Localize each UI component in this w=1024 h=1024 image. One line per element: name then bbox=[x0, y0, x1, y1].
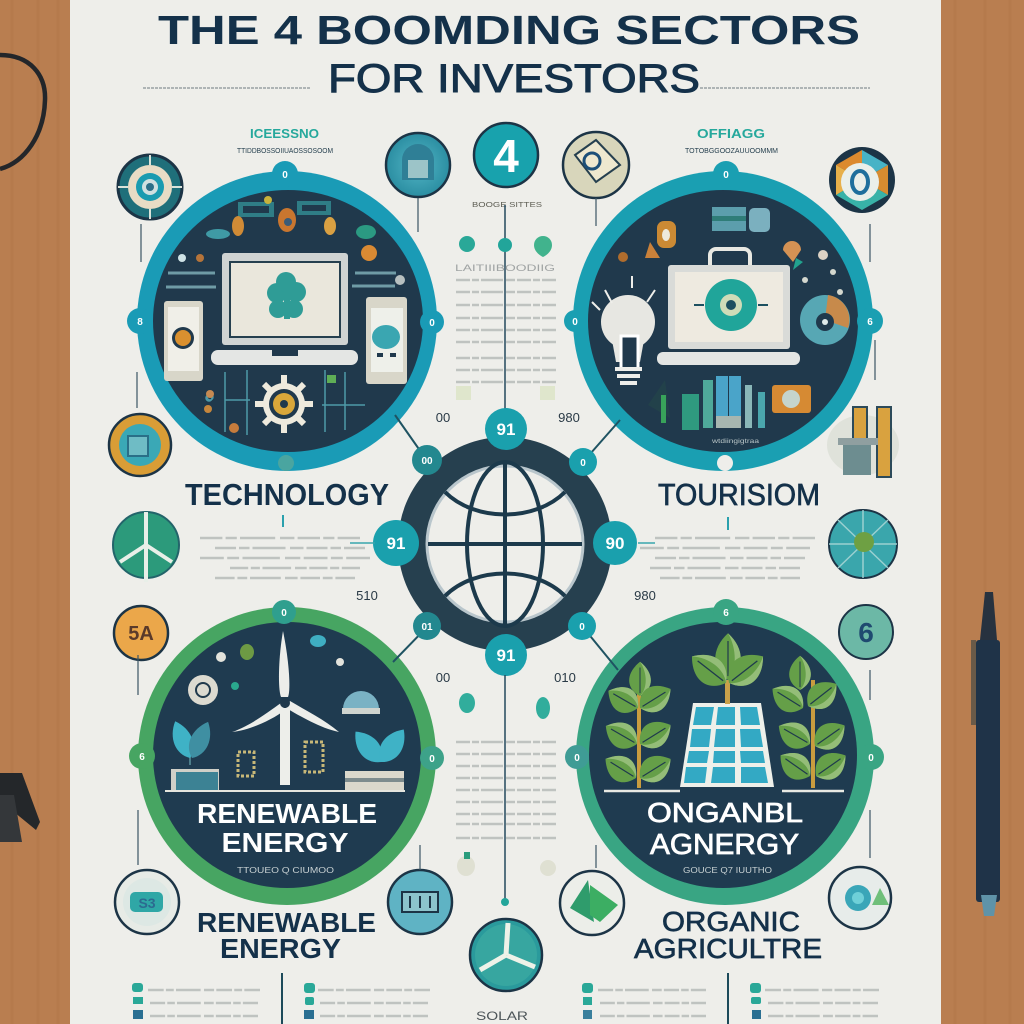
pie chart bbox=[800, 269, 850, 345]
right plant bbox=[766, 656, 853, 788]
icon: leaves badge bbox=[560, 871, 624, 935]
panel: technology circle: 0 bbox=[282, 170, 288, 181]
renewable energy heading bbox=[197, 907, 376, 964]
icon: teal badge lower left bbox=[115, 870, 179, 934]
connector numbers: 010 bbox=[554, 670, 576, 685]
laptop with handle bbox=[657, 249, 800, 365]
icon: teal badge lower left: S3 bbox=[138, 895, 156, 911]
inner heading bbox=[197, 798, 377, 858]
icon: building bbox=[827, 407, 899, 477]
left plant bbox=[599, 662, 677, 789]
center globe: 91 bbox=[497, 646, 515, 665]
small icons bbox=[188, 635, 380, 776]
icon: small turbine badge bottom bbox=[470, 919, 542, 991]
center sprout bbox=[683, 633, 772, 704]
panel: tourism circle: 6 bbox=[867, 317, 873, 328]
inner heading: ONGANBL bbox=[647, 797, 803, 828]
panel: renewable energy circle: 0 bbox=[281, 608, 287, 619]
laptop bbox=[211, 253, 358, 365]
center column caption and connector: BOOGE SITTES bbox=[472, 202, 542, 209]
icon: pen bbox=[971, 592, 1000, 916]
panel: renewable energy circle: 0 bbox=[429, 754, 435, 765]
center globe: 01 bbox=[421, 622, 433, 633]
title bbox=[158, 7, 860, 101]
circuit lines bbox=[206, 370, 365, 435]
renewable energy heading: RENEWABLE bbox=[197, 907, 376, 938]
top right label: Tourism caption bbox=[685, 126, 778, 155]
inner heading: ENERGY bbox=[222, 827, 349, 858]
inner heading: AGNERGY bbox=[650, 829, 799, 861]
panel: tourism circle: 0 bbox=[723, 170, 729, 181]
icon: orange badge left bbox=[109, 414, 171, 476]
center globe: 91 bbox=[497, 420, 515, 439]
phones bbox=[164, 297, 407, 384]
center column caption and connector bbox=[455, 202, 555, 430]
panel: organic circle: 6 bbox=[723, 608, 729, 619]
globe nodes bbox=[373, 408, 637, 676]
panel: organic circle: GOUCE Q7 IUUTHO bbox=[683, 866, 772, 875]
center globe: 90 bbox=[606, 534, 624, 553]
connector numbers: 00 bbox=[436, 410, 450, 425]
tourism text block bbox=[638, 517, 815, 578]
center column: 4 badge: 4 bbox=[493, 130, 519, 182]
solar panel bbox=[680, 703, 774, 787]
renewable energy heading: ENERGY bbox=[220, 933, 341, 964]
center globe: 0 bbox=[579, 622, 585, 633]
connector numbers: 980 bbox=[558, 410, 580, 425]
connector numbers: 510 bbox=[356, 588, 378, 603]
center globe bbox=[373, 408, 637, 676]
connector numbers: 980 bbox=[634, 588, 656, 603]
inner heading: RENEWABLE bbox=[197, 798, 377, 829]
panel: organic circle: 0 bbox=[868, 753, 874, 764]
books and briefcase bbox=[648, 376, 811, 430]
organic agriculture heading: ORGANIC bbox=[662, 906, 800, 937]
title: THE 4 BOOMDING SECTORS bbox=[158, 7, 860, 53]
panel: tourism circle: wtdiingigtraa bbox=[711, 439, 760, 445]
technology heading: TECHNOLOGY bbox=[185, 477, 389, 512]
tourism heading: TOURISIOM bbox=[658, 477, 820, 512]
panel: technology circle bbox=[127, 161, 444, 471]
center column caption and connector: LAITIIIBOODIIG bbox=[455, 263, 555, 273]
wind turbine bbox=[232, 631, 339, 785]
panel: organic circle: 0 bbox=[574, 753, 580, 764]
icon: location badge bbox=[829, 867, 891, 929]
icon: map badge right bbox=[829, 510, 897, 578]
light bulb bbox=[592, 276, 655, 383]
icon: glasses on desk bbox=[0, 55, 45, 169]
panel: technology circle: 8 bbox=[137, 317, 143, 328]
icon: 5A badge: 5A bbox=[128, 623, 154, 645]
inner heading bbox=[647, 797, 803, 861]
center globe: 0 bbox=[580, 458, 586, 469]
side vertical connector lines bbox=[137, 198, 875, 870]
bottom list: renewable energy bbox=[132, 973, 430, 1024]
center globe: 00 bbox=[421, 456, 433, 467]
connector numbers bbox=[356, 410, 656, 685]
panel: technology circle: 0 bbox=[429, 318, 435, 329]
top left label: Technology caption bbox=[237, 126, 333, 155]
organic agriculture heading: AGRICULTRE bbox=[634, 933, 822, 964]
plants bbox=[165, 718, 412, 791]
icon: wind turbine badge bbox=[113, 512, 179, 582]
organic agriculture heading bbox=[634, 906, 822, 964]
solar label: SOLAR bbox=[476, 1009, 528, 1023]
connector numbers: 00 bbox=[436, 670, 450, 685]
panel: renewable energy circle: TTOUEO Q CIUMOO bbox=[237, 866, 334, 875]
center bottom text block bbox=[456, 675, 556, 906]
top right label: Tourism caption: OFFIAGG bbox=[697, 126, 765, 141]
gear bbox=[255, 375, 313, 433]
icon: 5A badge bbox=[114, 606, 168, 660]
panel: renewable energy circle: 6 bbox=[139, 752, 145, 763]
top left label: Technology caption: TTIDDBOSSOIIUAOSSOSOOM bbox=[237, 148, 333, 155]
panel: tourism circle: 0 bbox=[572, 317, 578, 328]
top icons bbox=[618, 207, 828, 270]
icon: gear badge top left bbox=[118, 155, 182, 219]
icon: colour wheel badge bbox=[829, 147, 895, 213]
icon: binder clip bbox=[0, 773, 40, 842]
icon: beige map badge bbox=[563, 132, 629, 198]
panel: tourism circle bbox=[564, 161, 883, 471]
icon: calendar badge bbox=[388, 870, 452, 934]
panel: organic circle bbox=[565, 599, 884, 905]
icon: number six badge bbox=[839, 605, 893, 659]
ring nodes bbox=[127, 161, 444, 471]
panel: renewable energy circle bbox=[129, 600, 444, 905]
top icon cluster bbox=[166, 196, 405, 287]
icon: document badge top bbox=[386, 133, 450, 197]
technology text block bbox=[200, 515, 375, 578]
top left label: Technology caption: ICEESSNO bbox=[250, 126, 319, 141]
icon: number six badge: 6 bbox=[858, 617, 874, 648]
center top text block bbox=[456, 280, 556, 400]
top right label: Tourism caption: TOTOBGGOOZAUUOOMMM bbox=[685, 148, 778, 155]
bottom list: organic agriculture bbox=[582, 973, 879, 1024]
center column: 4 badge bbox=[474, 123, 538, 187]
center globe: 91 bbox=[387, 534, 405, 553]
title: FOR INVESTORS bbox=[328, 57, 700, 101]
